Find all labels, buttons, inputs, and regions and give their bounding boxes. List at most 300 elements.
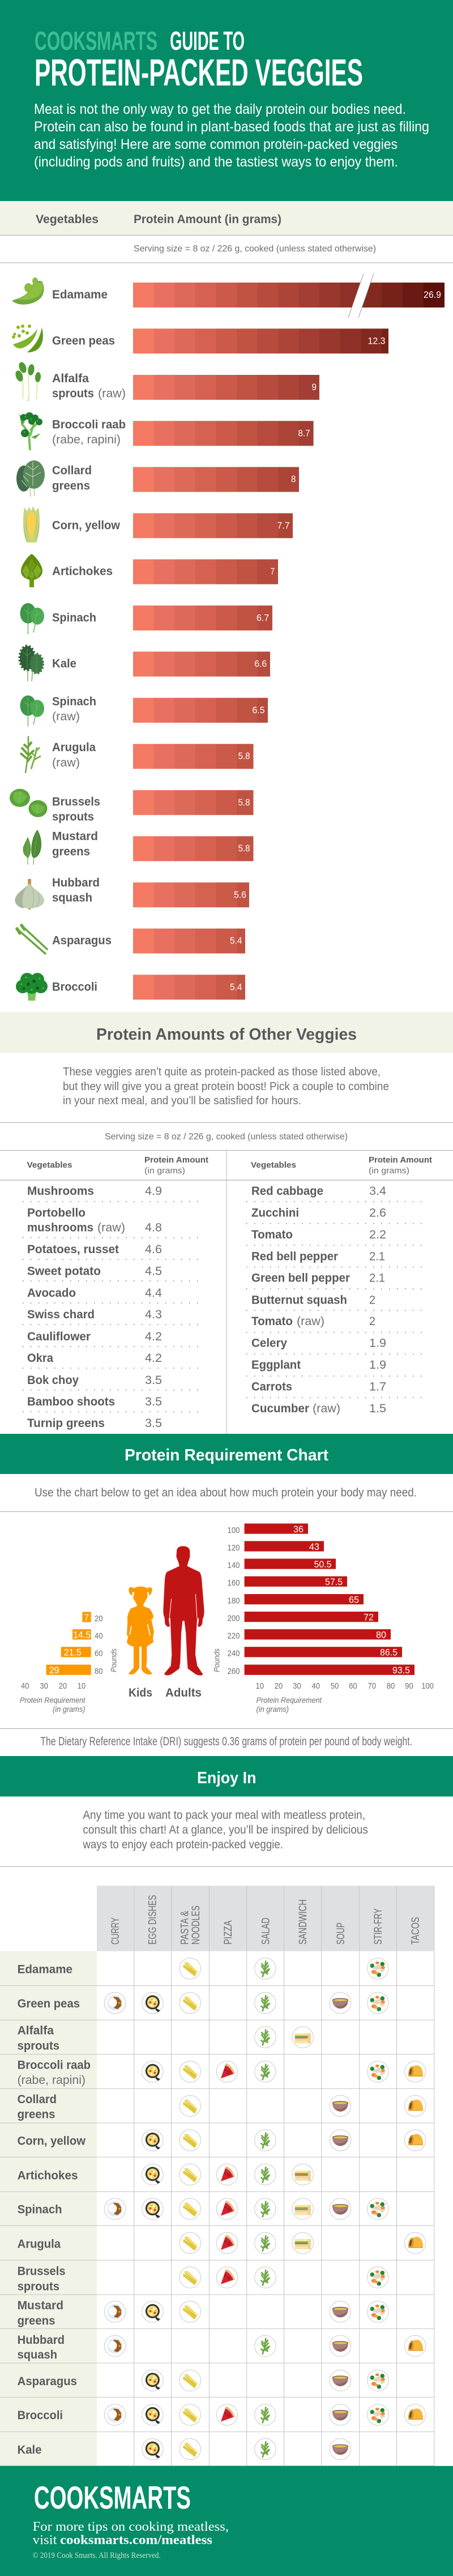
matrix row: Spinach [18,2198,388,2219]
row: Mustard greens: greens [52,845,90,858]
matrix row: Green peas [18,1992,388,2014]
icon: broccoli [16,973,48,1001]
row: Artichokes [21,554,278,587]
row: Spinach: 6.7 [257,612,269,623]
matrix row: Artichokes: Artichokes [18,2169,78,2182]
icon: pizza [216,2164,238,2185]
matrix header: CURRY [110,1917,122,1945]
row: Collard greens: 8 [291,474,296,485]
column headers: Vegetables [27,1160,72,1170]
row: Artichokes: 7 [271,566,275,577]
icon: pasta [180,2061,200,2082]
icon: pasta [180,2404,200,2425]
matrix row: Broccoli: Broccoli [18,2409,63,2422]
paragraph: other veggies [63,1066,389,1107]
icon: sandwich [292,2027,313,2048]
chart: adults protein requirement [212,1523,434,1714]
row: Asparagus [17,925,245,954]
left column rows: 4.9 [145,1185,162,1198]
matrix row: Hubbard squash: Hubbard [18,2334,65,2347]
column headers: Vegetables [251,1160,296,1170]
chart: adults protein requirement: 180 [228,1596,240,1606]
row: Alfalfa sprouts: (raw) [98,387,126,400]
paragraph: other veggies: in your next meal, and you’ll be satisfied for hours. [63,1095,301,1107]
row: Green peas: Green peas [52,334,115,347]
icon: stir-fry [367,1958,388,1979]
matrix row: Broccoli raab: Broccoli raab [18,2058,91,2071]
matrix row: Collard greens [18,2093,426,2121]
matrix row: Broccoli raab: (rabe, rapini) [18,2074,86,2087]
icon: curry [104,2335,126,2356]
icon: pasta [180,2370,200,2391]
panel: header [0,0,453,201]
row: Edamame: Edamame [52,288,108,301]
right column rows: Tomato [251,1315,293,1328]
icon: salad [255,2027,276,2048]
matrix row: Edamame: Edamame [18,1963,72,1976]
section heading: enjoy in: Enjoy In [197,1769,256,1787]
right column rows: 2.1 [369,1272,385,1285]
row: Artichokes: Artichokes [52,565,113,578]
icon: broccoli raab [19,412,42,450]
icon: spinach [20,695,44,727]
icon: soup [330,2301,351,2322]
table: enjoy in matrix [0,1886,434,2466]
left column rows: Mushrooms [27,1185,94,1198]
row: Brussels sprouts: sprouts [52,810,94,823]
row: Arugula: 5.8 [238,751,250,762]
chart: kids protein requirement: 40 [21,1681,29,1691]
left column rows: 3.5 [145,1395,162,1408]
label: kids: Kids [129,1686,152,1699]
logo: CookSmarts [34,2480,191,2516]
figure: kid silhouette [127,1587,154,1674]
chart: adults protein requirement: 10 [256,1681,264,1691]
left column rows: Swiss chard [27,1308,95,1321]
chart: adults protein requirement: 40 [311,1681,320,1691]
icon: salad [255,2335,276,2356]
right column rows: 1.5 [369,1402,386,1415]
call to action [33,2519,229,2547]
figure: adult silhouette [163,1546,204,1676]
right column rows: Carrots [251,1381,292,1393]
table header band: Vegetables [36,213,99,226]
row: Green peas: 12.3 [368,335,385,346]
left column rows: (raw) [97,1221,125,1234]
right column rows: 1.7 [369,1381,386,1393]
matrix row: Alfalfa sprouts: sprouts [18,2039,59,2052]
logo: CookSmarts: COOKSMARTS [35,26,157,55]
row: Kale: Kale [52,657,76,670]
column headers [27,1155,432,1176]
chart: adults protein requirement: 93.5 [392,1665,410,1676]
icon: pizza [216,2198,238,2219]
row: Edamame: 26.9 [424,289,441,300]
left column rows: 4.5 [145,1265,162,1278]
row: Edamame [12,274,445,318]
row: Arugula [20,736,254,773]
section heading: enjoy in [0,1756,453,1796]
icon: soup [330,2198,351,2219]
right column rows: Cucumber [251,1402,309,1415]
row: Spinach raw: (raw) [52,710,80,723]
left column rows: Portobello [27,1207,86,1220]
left column rows: 4.6 [145,1243,162,1256]
icon: pasta [180,2095,200,2117]
chart: kids protein requirement [20,1612,118,1714]
icon: salad [255,1958,276,1979]
axis break [348,274,374,318]
matrix row: Asparagus [18,2370,388,2391]
chart: kids protein requirement: 30 [40,1681,48,1691]
icon: salad [255,2198,276,2219]
matrix row: Brussels sprouts [18,2265,388,2293]
icon: asparagus [17,925,47,954]
icon: egg dishes [142,2370,163,2391]
row: Spinach raw [20,695,268,727]
right column rows: Butternut squash [251,1293,347,1307]
section heading: protein requirement chart [0,1434,453,1474]
icon: tacos [404,2335,426,2356]
logo: CookSmarts [35,26,157,55]
chart: kids protein requirement: (in grams) [53,1704,85,1714]
matrix header: EGG DISHES [147,1895,159,1945]
chart: adults protein requirement: 260 [228,1667,240,1676]
chart: adults protein requirement: 80 [376,1630,386,1641]
icon: curry [104,1992,126,2014]
icon: tacos [404,2130,426,2151]
icon: pasta [180,2301,200,2322]
row: Kale: 6.6 [255,659,267,669]
icon: pasta [180,2130,200,2151]
chart: adults protein requirement: 72 [364,1612,374,1623]
row: Collard greens: greens [52,479,90,492]
row: Broccoli raab: Broccoli raab [52,418,126,431]
left column rows: Avocado [27,1287,76,1300]
icon: stir-fry [367,2267,388,2288]
row: Collard greens: Collard [52,464,92,477]
row: Broccoli raab: 8.7 [298,428,310,438]
copyright: © 2019 Cook Smarts. All Rights Reserved. [33,2551,161,2560]
row: Spinach [20,603,272,634]
icon: stir-fry [367,1992,388,2014]
matrix header: SANDWICH [297,1899,309,1945]
matrix row: Hubbard squash: squash [18,2348,57,2361]
icon: stir-fry [367,2404,388,2425]
paragraph: enjoy in [83,1809,368,1851]
left column rows [27,1185,162,1430]
matrix row: Hubbard squash [18,2334,426,2361]
chart: adults protein requirement: 20 [275,1681,283,1691]
intro paragraph [34,101,429,170]
row: Corn [23,506,293,542]
row: Broccoli raab: (rabe, rapini) [52,433,121,446]
icon: pasta [180,2232,200,2254]
icon: egg dishes [142,2164,163,2185]
left column rows: Cauliflower [27,1330,91,1343]
matrix row: Mustard greens: Mustard [18,2299,63,2312]
chart: adults protein requirement: 80 [387,1681,395,1691]
row: Collard greens [16,460,299,497]
matrix row: Brussels sprouts: Brussels [18,2265,66,2278]
section heading: other veggies [0,1012,453,1053]
matrix row: Alfalfa sprouts: Alfalfa [18,2024,54,2037]
matrix header: TACOS [410,1917,422,1945]
row: Mustard greens: 5.8 [238,843,250,854]
chart: adults protein requirement: Pounds [212,1648,221,1672]
row: Spinach raw: Spinach [52,695,96,708]
matrix row: Corn, yellow [18,2130,426,2151]
icon: pizza [216,2061,238,2082]
left column rows: mushrooms [27,1221,93,1234]
logo: CookSmarts: COOKSMARTS [34,2480,191,2516]
row: Mustard greens [23,830,253,865]
matrix row: Broccoli [18,2404,426,2425]
chart: adults protein requirement: 120 [228,1543,240,1553]
matrix row: Broccoli raab [18,2058,426,2087]
serving size note: Serving size = 8 oz / 226 g, cooked (unless stated otherwise) [105,1132,348,1142]
row: Asparagus: Asparagus [52,934,112,947]
left column rows: 3.5 [145,1417,162,1430]
chart: adults protein requirement: 50.5 [314,1559,332,1570]
icon: soup [330,2404,351,2425]
left column rows: 3.5 [145,1374,162,1387]
icon: egg dishes [142,2130,163,2151]
icon: pasta [180,2164,200,2185]
icon: hubbard squash [15,879,44,909]
icon: pasta [180,2198,200,2219]
right column rows: 2.6 [369,1207,386,1220]
paragraph: other veggies: These veggies aren’t quite as protein-packed as those listed above, [63,1066,381,1078]
table: other veggies [0,1150,453,1434]
right column rows: Celery [251,1336,287,1350]
row: Broccoli [16,973,245,1001]
chart: adults protein requirement: 70 [368,1681,376,1691]
icon: salad [255,2061,276,2082]
icon: egg dishes [142,2061,163,2082]
icon: stir-fry [367,2198,388,2219]
section heading: other veggies: Protein Amounts of Other Veggies [96,1026,357,1044]
icon: sandwich [292,2232,313,2254]
chart: adults protein requirement: 160 [228,1578,240,1588]
chart: adults protein requirement: 50 [331,1681,339,1691]
icon: soup [330,2130,351,2151]
chart: adults protein requirement: (in grams) [256,1704,289,1714]
icon: curry [104,2198,126,2219]
paragraph: enjoy in: ways to enjoy each protein-packed veggie. [83,1838,283,1851]
row: Green peas [12,324,388,353]
right column rows: 3.4 [369,1185,386,1198]
icon: spinach [20,603,44,634]
icon: pasta [180,1958,200,1979]
icon: salad [255,1992,276,2014]
row: Hubbard squash [15,876,249,909]
icon: brussels sprouts [10,789,48,817]
row: Hubbard squash: squash [52,891,92,904]
icon: mustard greens [23,830,41,865]
row: Corn: 7.7 [277,520,290,531]
row: Arugula: (raw) [52,756,80,769]
intro paragraph: Protein can also be found in plant-based foods that are just as filling [34,119,429,135]
paragraph: chart intro: Use the chart below to get an idea about how much protein your body may need. [35,1486,417,1500]
matrix row: Artichokes [18,2164,313,2185]
call to action: For more tips on cooking meatless, [33,2519,229,2534]
chart: adults protein requirement: Protein Requirement [256,1695,322,1704]
dotted row separators [23,1202,429,1412]
call to action: visit [33,2533,57,2547]
chart: adults protein requirement: 57.5 [325,1577,343,1587]
intro paragraph: Meat is not the only way to get the daily protein our bodies need. [34,101,406,117]
row: Spinach raw: 6.5 [253,704,265,715]
left column rows: Turnip greens [27,1417,105,1430]
paragraph: enjoy in: Any time you want to pack your meal with meatless protein, [83,1809,365,1822]
left column rows: Potatoes, russet [27,1243,119,1256]
chart: adults protein requirement: 60 [349,1681,357,1691]
chart: kids protein requirement: 20 [95,1614,103,1624]
icon: corn [23,506,40,542]
section heading: protein requirement chart: Protein Requirement Chart [125,1446,328,1464]
table header band: Protein Amount (in grams) [134,213,281,226]
left column rows: 4.2 [145,1330,162,1343]
matrix row: Asparagus: Asparagus [18,2375,77,2388]
intro paragraph: (including pods and fruits) and the tastiest ways to enjoy them. [34,154,398,170]
icon: collard greens [16,460,45,497]
right column rows: Red bell pepper [251,1250,338,1263]
icon: pasta [180,2438,200,2460]
row: Alfalfa sprouts: Alfalfa [52,372,89,385]
chart: kids protein requirement: Pounds [109,1648,118,1672]
icon: curry [104,2301,126,2322]
chart: adults protein requirement: 86.5 [380,1647,398,1658]
icon: egg dishes [142,2438,163,2460]
matrix row: Kale [18,2438,351,2460]
column headers: Protein Amount [144,1155,208,1165]
icon: soup [330,2335,351,2356]
row: Asparagus: 5.4 [230,935,242,946]
icon: tacos [404,2404,426,2425]
right column rows: 1.9 [369,1359,386,1372]
chart: kids protein requirement: 7 [84,1612,89,1623]
matrix row: Brussels sprouts: sprouts [18,2280,59,2293]
matrix header [97,1886,434,1951]
chart: kids protein requirement: 20 [59,1681,67,1691]
matrix row: Edamame [18,1958,388,1979]
paragraph: other veggies: but they will give you a great protein boost! Pick a couple to combine [63,1080,389,1093]
matrix row: Green peas: Green peas [18,1997,80,2010]
chart: kids protein requirement: Protein Requirement [20,1695,86,1704]
left column rows: Bamboo shoots [27,1395,115,1408]
chart: adults protein requirement: 36 [293,1524,304,1535]
icon: pasta [180,1992,200,2014]
icon: tacos [404,2232,426,2254]
left column rows: 4.4 [145,1287,162,1300]
chart: adults protein requirement: 30 [293,1681,301,1691]
icon: stir-fry [367,2301,388,2322]
matrix row: Kale: Kale [18,2443,42,2457]
icon: pizza [216,2267,238,2288]
bar chart: protein amounts [10,274,445,1001]
serving size note: Serving size = 8 oz / 226 g, cooked (unless stated otherwise) [134,244,376,254]
row: Mustard greens: Mustard [52,830,98,843]
left column rows: 4.2 [145,1352,162,1365]
matrix row: Spinach: Spinach [18,2203,62,2216]
icon: soup [330,2370,351,2391]
column headers: Protein Amount [369,1155,432,1165]
icon: salad [255,2164,276,2185]
right column rows: Eggplant [251,1359,301,1372]
icon: egg dishes [142,2301,163,2322]
chart: adults protein requirement: 140 [228,1561,240,1570]
icon: salad [255,2267,276,2288]
chart: kids protein requirement: 80 [95,1667,103,1676]
icon: tacos [404,2061,426,2082]
icon: stir-fry [367,2061,388,2082]
icon: salad [255,2438,276,2460]
row: Broccoli: Broccoli [52,980,97,993]
right column rows: (raw) [297,1315,324,1328]
icon: tacos [404,2095,426,2117]
row: Spinach: Spinach [52,611,96,624]
matrix header: PASTA & [180,1911,191,1945]
icon: soup [330,1992,351,2014]
call to action: cooksmarts.com/meatless [60,2533,212,2547]
left column rows: 4.8 [145,1221,162,1234]
icon: edamame [12,277,44,305]
row: Brussels sprouts: 5.8 [238,797,250,808]
chart: adults protein requirement: 200 [228,1614,240,1623]
left column rows: Bok choy [27,1374,79,1387]
left column rows: Okra [27,1352,53,1365]
chart: adults protein requirement: 240 [228,1649,240,1659]
matrix row: Collard greens: Collard [18,2093,57,2106]
icon: pizza [216,2404,238,2425]
right column rows: 1.9 [369,1336,386,1350]
chart: kids protein requirement: 60 [95,1649,103,1659]
chart: adults protein requirement: 90 [405,1681,413,1691]
row: Broccoli: 5.4 [230,981,242,992]
matrix row: Arugula: Arugula [18,2237,61,2250]
right column rows: Green bell pepper [251,1272,350,1285]
row: Arugula: Arugula [52,741,96,754]
right column rows [251,1185,386,1415]
chart: adults protein requirement: 220 [228,1631,240,1641]
row: Brussels sprouts [10,789,254,823]
matrix header: SOUP [335,1923,347,1945]
icon: salad [255,2404,276,2425]
row: Hubbard squash: 5.6 [234,889,246,900]
title line: guide to: GUIDE TO [170,26,245,55]
matrix row: Mustard greens: greens [18,2314,55,2327]
chart: kids protein requirement: 21.5 [64,1647,82,1658]
right column rows: 2 [369,1293,375,1307]
column headers: (in grams) [369,1166,409,1176]
icon: pasta [180,2267,200,2288]
icon: egg dishes [142,2404,163,2425]
icon: curry [104,2404,126,2425]
matrix row: Arugula [18,2232,426,2254]
chart: adults protein requirement: 65 [349,1595,359,1605]
matrix row: Corn, yellow: Corn, yellow [18,2135,86,2148]
icon: artichoke [21,554,42,587]
right column rows: 2.2 [369,1228,386,1241]
icon: green peas [12,324,43,352]
row: Brussels sprouts: Brussels [52,795,100,808]
column headers: (in grams) [144,1166,185,1176]
chart: adults protein requirement: 100 [228,1526,240,1535]
row: Alfalfa sprouts: sprouts [52,387,94,400]
matrix header: PIZZA [223,1920,234,1945]
row: Corn: Corn, yellow [52,519,121,532]
